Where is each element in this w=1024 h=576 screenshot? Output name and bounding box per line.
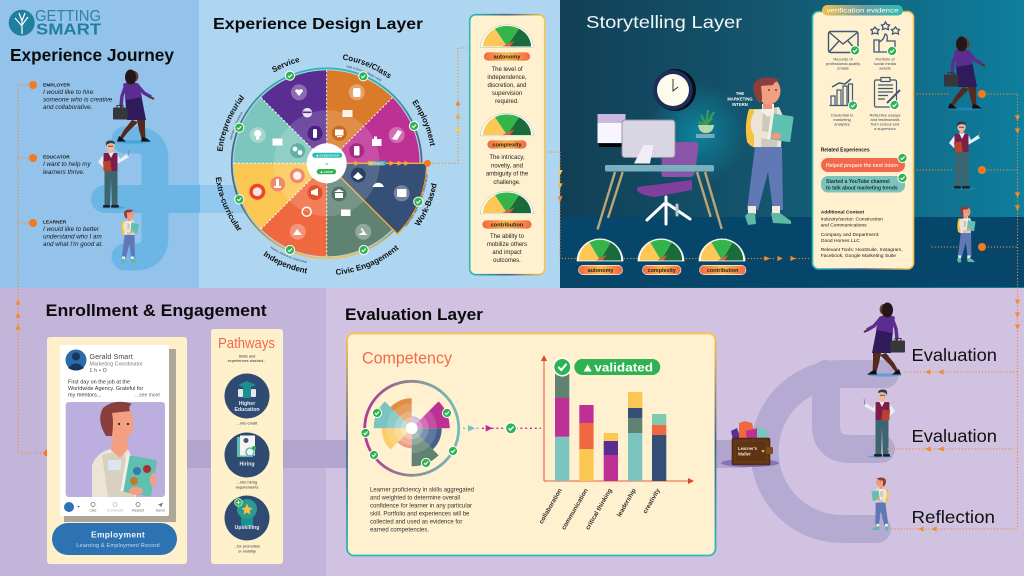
text: evidence captions: Portfolio of [875,56,895,62]
logo: GETTING [35,8,101,25]
label: the marketing intern: MARKETING [727,96,753,102]
text: pathway outcomes: or mobility [238,548,256,554]
wheel [216,54,437,275]
pathway: higher education: Education [234,407,260,413]
block: employer [29,81,113,111]
wheel sublabels: startups and freelance [230,112,243,140]
title: storytelling layer: Storytelling Layer [586,12,742,32]
block: learner: understand who I am [43,234,102,240]
text: intro [228,354,266,363]
text: contribution definition: and impact [492,250,522,256]
text: complexity definition: novelty, and [491,163,523,169]
icons: entrepreneurial [250,127,305,158]
text: evidence captions: Credential in [831,112,853,118]
figure: learner evaluation [871,478,889,531]
arrows: left feedback up [15,299,50,456]
wheel sublabels [230,65,428,263]
title: enrollment and engagement: Enrollment & Engagement [46,301,267,320]
center: experience equals value: ▲experience [316,153,340,158]
pathway: hiring: Hiring [240,462,254,468]
pill: contribution: contribution [491,222,524,228]
icon: learner's wallet [721,421,779,467]
text: competency description: confidence for learner in any particular [370,504,472,510]
labels: skills: leadership [616,487,638,518]
panel: storytelling layer background [560,0,1024,288]
text: complexity definition: The intricacy, [489,155,525,161]
wheel labels: Civic Engagement [336,245,399,275]
text: profile header [90,354,143,374]
text: competency description: collected and used as evidence for [370,520,462,526]
illustration: post image [66,402,165,497]
text: contribution definition: The ability to [490,234,525,240]
wheel labels: Employment [412,100,436,146]
text: pathway outcomes: requirements [236,484,258,490]
icons: employment [349,127,405,158]
wheel sublabels: inquiry, adventure, expression [270,246,307,263]
pill: complexity: complexity [492,142,522,148]
text: evidence captions: and testimonials [871,117,899,122]
arrows: wheel to gauges [455,100,461,132]
text: complexity definition: ambiguity of the [486,172,529,178]
icons: course [332,84,365,141]
labels: skills: collaboration [538,487,564,525]
text: evidence captions: a supervisor [874,126,897,131]
block: educator: I want to help my [43,161,91,168]
block: employer: someone who is creative [43,96,113,104]
wheel labels: Entrepreneurial [217,94,244,152]
title: experience journey: Experience Journey [10,45,174,65]
title: experience design layer: Experience Design Layer [213,16,423,33]
arrows: gauges to story [557,170,563,202]
panel: pathways [211,329,283,564]
text: contribution definition: mobilize others [487,242,527,248]
block: employer: and collaborative. [43,104,92,111]
icon: chart [830,79,858,110]
block: learner: and what I'm good at. [43,241,103,248]
post actions: Repost [132,508,145,512]
pathway: hiring [224,432,270,478]
block: learner: I would like to better [43,226,100,233]
figure: employer [113,70,154,144]
heading: competency: Competency [362,348,452,368]
text: evidence captions: assets [879,66,891,70]
wheel labels: Work-Based [414,183,437,226]
text: additional context: and Communications [821,222,867,228]
pill: youtube channel [821,173,907,192]
block: educator [29,154,91,176]
pill: contribution [482,220,532,229]
text: autonomy definition [487,67,527,105]
text: contribution definition: outcomes. [493,258,521,264]
post actions [64,502,164,512]
avatar [66,350,86,370]
title: pathways: Pathways [218,335,275,352]
mini gauges and pills: complexity [648,268,676,274]
pill: verification evidence: verification evidence [826,8,899,15]
block: employer: EMPLOYER [43,82,70,88]
text: additional context: Company and Department: [821,232,879,238]
pill: employment record: Employment [91,530,145,540]
label: the marketing intern: THE [736,91,744,96]
wheel sublabels: high school or college credit [346,65,382,82]
text: profile header: Gerald Smart [90,354,133,361]
wheel labels [216,54,437,275]
illustration: desk scene [598,114,722,230]
pathway: higher education [224,374,270,418]
text: additional context: Additional Context [821,210,865,216]
wheel checks [235,71,423,255]
text: additional context: Relevant Tools: HootSuite, Instagram, [821,247,903,253]
gauge: autonomy [481,25,533,47]
gauge: complexity [481,113,533,136]
center: experience equals value: = [325,162,329,168]
panel: competency card [347,334,716,556]
wheel endpoint dot [424,160,431,167]
label: evaluation 2: Evaluation [912,426,997,446]
gauge: contribution [481,191,533,214]
text: competency description: skill. Portfolio and experiences will be [370,512,470,518]
text: evidence captions: professional-quality [826,61,860,66]
text: competency description: earned competencies. [370,528,429,534]
text: post body: my mentors... [68,393,102,399]
wheel sublabels: internships, apprenticeships, client projects [404,174,428,227]
arrows: to personas [918,369,944,532]
center: experience equals value: ▲value [320,169,334,174]
icons: independent [290,185,322,240]
text: autonomy definition: discretion, and [487,83,527,89]
text: profile header: Marketing Coordinator [90,362,143,368]
post actions: Comment [107,508,124,512]
journey path: evaluation [150,374,885,529]
icons: work-based [351,168,410,201]
block: educator: EDUCATOR [43,154,70,160]
label: the marketing intern [727,91,753,107]
pathway: upskilling: Upskilling [235,525,259,531]
pill: complexity [487,140,527,149]
text: autonomy definition: supervision [492,91,522,97]
mini gauges and pills [577,239,746,275]
text: autonomy definition: The level of [491,67,523,73]
panel: gauges card [470,15,545,275]
text: pathway outcomes: ...into credit [237,420,258,426]
text: post body: Worldwide Agency. Grateful for [68,386,143,392]
connector: radial to bars [463,423,541,434]
figure: educator evaluation [864,389,895,458]
panel: experience journey background [0,0,199,288]
title: evaluation layer: Evaluation Layer [345,306,484,324]
icon: plant [696,110,714,138]
text: profile header: 1 h • O [90,368,107,374]
icon: clock [653,69,696,111]
icons: extra-curricular [249,168,305,200]
logo [9,8,101,39]
pill: youtube channel: to talk about marketing trends [826,186,898,192]
text: complexity definition: challenge. [493,180,521,186]
wheel labels: Extra-curricular [216,177,242,231]
text: competency description: and weighted to determine overall [370,496,460,502]
figure: marketing intern [745,77,794,225]
figure: learner [121,210,139,263]
labels: skills [538,487,662,531]
glow [647,83,747,183]
figure: educator [98,140,129,209]
text: pathway outcomes: ...into hiring [237,480,257,484]
pill: next intern: Helped prepare the next intern [826,163,898,169]
text: competency description: Learner proficiency in skills aggregated [370,488,474,494]
line: analysis [346,161,427,166]
block: educator: learners thrive. [43,169,85,176]
text: autonomy definition: independence, [487,75,527,81]
text: evidence captions: analytics [834,122,850,126]
icon: clipboard [874,78,900,110]
post actions: Like [90,508,96,512]
pathway: higher education: Higher [239,401,255,407]
text: post body: ...see more [135,393,160,399]
wheel labels: Independent [264,251,308,274]
labels: skills: communication [560,487,590,531]
journey path: top panel [105,140,262,257]
badge: validated [554,358,660,376]
block: learner: LEARNER [43,220,67,226]
nodes and arrows: right column [978,90,1020,330]
dotted line: wheel to gauges [427,48,469,163]
text: contribution definition [487,234,527,264]
pill: next intern [821,153,907,172]
block: learner [29,219,103,248]
figure: educator story [949,121,980,190]
label: evaluation 1: Evaluation [912,345,997,365]
dotted lines: to personas [888,372,1017,529]
figure: learner story [957,207,976,263]
text: evidence captions: marketing [833,117,851,122]
text: pathway outcomes [234,420,260,554]
text: competency description [370,488,474,534]
heading: related experiences: Related Experiences [821,148,870,154]
text: evidence captions: emails [837,66,849,70]
center: experience equals value [307,143,347,183]
text: intro: Skills and [239,354,255,358]
text: evidence captions: Records of [833,56,854,62]
dotted lines: story personas [914,94,1018,529]
pill: autonomy: autonomy [494,54,521,60]
text: additional context: Facebook, Google Marketing Suite [821,253,896,259]
icons: service [291,84,322,141]
chart: radial competency [361,381,459,475]
icon: social stars and thumb [871,22,900,56]
pill: employment record [52,523,177,555]
text: intro: experiences stacked... [228,358,266,363]
text: evidence captions: social media [874,61,897,66]
label: reflection: Reflection [912,507,995,527]
panel: employment card [47,337,187,564]
text: complexity definition [486,155,529,186]
pill: youtube channel: Started a YouTube channel [826,179,890,185]
arrows: story to verification [764,256,810,261]
text: evidence captions [826,56,901,131]
line: analysis: Analysis [370,162,384,166]
storytelling floor [560,217,1024,287]
icon: learner's wallet: Learner's [738,446,758,451]
panel: verification evidence [812,5,914,269]
figure: employer story [944,36,985,111]
pill: verification evidence [822,5,903,16]
block: employer: I would like to hire [43,89,94,96]
text: autonomy definition: required. [495,99,519,105]
label: the marketing intern: INTERN [732,102,748,107]
text: evidence captions: Reflective essays [869,112,901,118]
badge: validated: ▲validated [581,360,653,374]
wheel labels: Service [272,58,300,72]
text: additional context: Industry/sector: Construction [821,216,883,222]
text: evidence captions: from school and [871,122,899,126]
text: post body: First day on the job at the [68,379,130,385]
panel: enrollment background [0,288,326,576]
icons: civic [332,186,371,240]
logo: SMART [36,22,101,39]
icon: learner's wallet: Wallet [738,452,751,456]
pill: autonomy [484,52,530,61]
pill: employment record: Learning & Employment Record [76,543,160,549]
panel: experience design layer background [199,0,560,288]
chart: stacked bars [541,355,694,484]
figure: employer evaluation [864,302,905,377]
post actions: Send [156,508,164,512]
dotted line: gauges to story [545,152,775,258]
pathway: upskilling [224,496,270,540]
text: pathway outcomes: ...for promotion [234,544,260,548]
mini gauges and pills: contribution [707,268,738,274]
text: additional context: Good Homes LLC [821,238,860,244]
dotted line: left feedback [18,85,47,453]
icon: envelope [828,32,860,55]
panel: evaluation background [326,288,1024,576]
labels: skills: critical thinking [584,487,614,531]
mini gauges and pills: autonomy [588,268,613,274]
wheel labels: Course/Class [343,54,391,78]
labels: skills: creativity [642,487,662,515]
text: post body [68,379,160,399]
text: additional context [821,210,903,259]
